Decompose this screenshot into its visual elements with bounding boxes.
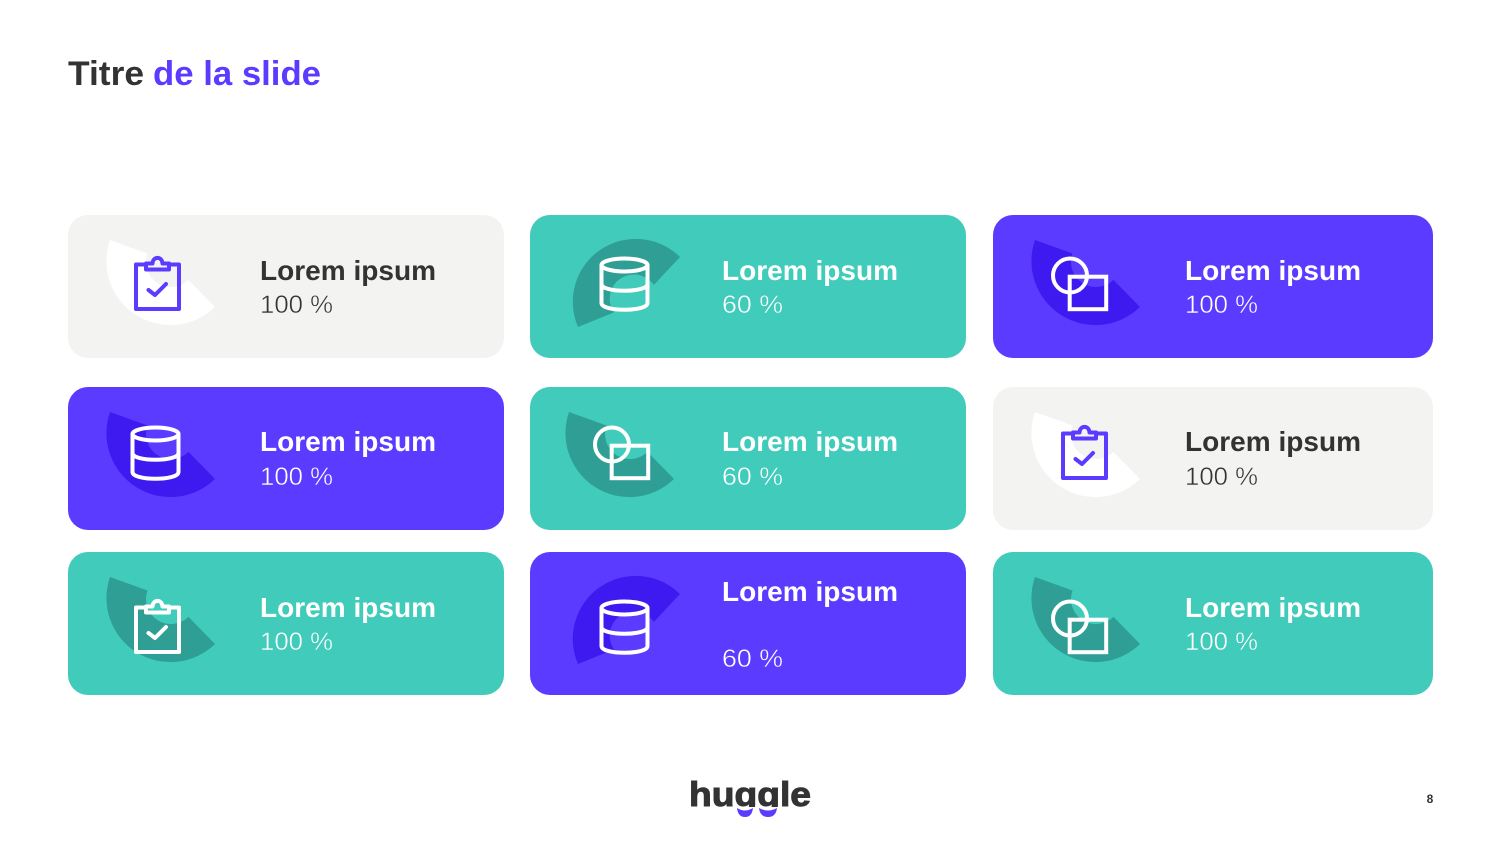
text: label and value: 60 %	[722, 291, 783, 319]
text: label and value: Lorem ipsum	[722, 426, 898, 457]
text: label and value: 100 %	[1185, 628, 1258, 656]
text: label and value	[1185, 255, 1361, 319]
icon: clipboard on white sector	[1031, 412, 1140, 497]
text: label and value: Lorem ipsum	[722, 255, 898, 286]
title: de la slide	[153, 55, 321, 93]
page number: 8	[1427, 792, 1434, 806]
panel: row 1 column 2	[530, 215, 966, 358]
icon: database on dark purple sector	[106, 412, 215, 497]
text: label and value	[260, 255, 436, 319]
title: Titre	[68, 55, 144, 93]
text: label and value: Lorem ipsum	[260, 426, 436, 457]
text: label and value: Lorem ipsum	[1185, 426, 1361, 457]
icon: clipboard on white sector	[106, 240, 215, 325]
panel: row 3 column 2	[530, 552, 966, 695]
title	[68, 55, 321, 93]
text: label and value	[1185, 592, 1361, 656]
icon: clipboard on dark teal sector	[106, 577, 215, 662]
text: label and value	[722, 255, 898, 319]
icon: database on dark teal sector	[573, 239, 680, 327]
text: label and value: 100 %	[260, 463, 333, 491]
text: label and value	[722, 426, 898, 491]
text: label and value: 60 %	[722, 463, 783, 491]
icon: shapes on dark teal sector	[1031, 577, 1140, 662]
text: label and value	[260, 426, 436, 491]
text: label and value: 100 %	[1185, 291, 1258, 319]
panel: row 2 column 1	[68, 387, 504, 530]
panel: row 2 column 2	[530, 387, 966, 530]
icon: shapes on dark purple sector	[1031, 240, 1140, 325]
text: label and value	[260, 592, 436, 656]
text: label and value: 100 %	[260, 628, 333, 656]
text: label and value: 60 %	[722, 645, 783, 673]
text: label and value: Lorem ipsum	[260, 255, 436, 286]
panel: row 1 column 1	[68, 215, 504, 358]
text: label and value: Lorem ipsum	[1185, 592, 1361, 623]
text: label and value: 100 %	[260, 291, 333, 319]
text: label and value: Lorem ipsum	[722, 576, 898, 607]
panel: row 3 column 3	[993, 552, 1433, 695]
panel: row 2 column 3	[993, 387, 1433, 530]
text: label and value	[722, 576, 898, 673]
icon: shapes on dark teal sector	[565, 412, 674, 497]
text: label and value: Lorem ipsum	[260, 592, 436, 623]
text: label and value	[1185, 426, 1361, 491]
text: label and value: Lorem ipsum	[1185, 255, 1361, 286]
panel: row 3 column 1	[68, 552, 504, 695]
panel: row 1 column 3	[993, 215, 1433, 358]
logo: huggle: huggle	[689, 776, 811, 814]
icon: database on dark purple sector	[573, 576, 680, 664]
text: label and value: 100 %	[1185, 463, 1258, 491]
